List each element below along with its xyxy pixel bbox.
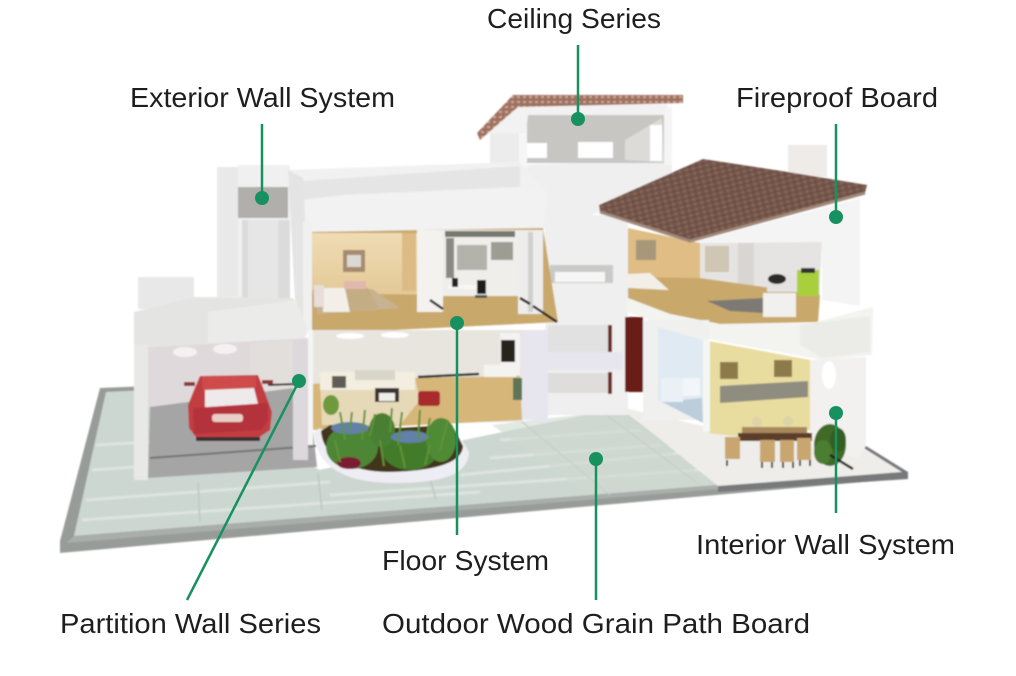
- sofa: [320, 370, 415, 402]
- leader: partition wall series: [187, 374, 306, 600]
- central stack: [522, 215, 628, 420]
- kitchen: [703, 340, 810, 436]
- upper right room: [628, 228, 822, 324]
- pillars: [417, 230, 443, 312]
- red door: [625, 317, 643, 392]
- garage: [134, 277, 317, 480]
- label: floor system: Floor System: [382, 545, 549, 576]
- backsplash: [720, 381, 808, 403]
- bedroom floor: [308, 293, 558, 334]
- garage floor: [148, 386, 317, 478]
- floor slab: [627, 298, 873, 360]
- TV wall unit: [500, 333, 520, 375]
- terrace kerb: [718, 446, 908, 492]
- dining set: [725, 416, 812, 468]
- study room: [443, 230, 519, 296]
- chair figure: [418, 268, 438, 296]
- terracotta roof: [599, 159, 867, 242]
- label: interior wall system: Interior Wall System: [696, 529, 955, 560]
- planter with garden: [314, 395, 469, 483]
- leader: fireproof board: [829, 124, 843, 224]
- leader: exterior wall system: [255, 124, 269, 205]
- label: ceiling series: Ceiling Series: [487, 3, 661, 34]
- potted tree: [814, 424, 846, 466]
- leader: ceiling series: [571, 45, 585, 126]
- bed: [312, 281, 400, 314]
- wall art: [343, 250, 365, 272]
- office chairs: [452, 278, 458, 287]
- right pillar: [810, 357, 866, 458]
- upper roof terrace: [477, 95, 683, 228]
- chimney: [788, 145, 827, 177]
- bathroom: [658, 327, 703, 423]
- bedroom wall: [310, 233, 417, 295]
- green panel: [797, 270, 819, 296]
- lounge sofa: [707, 274, 797, 317]
- leader: floor system: [450, 316, 464, 535]
- garage back wall: [148, 338, 308, 408]
- rear left tower: [217, 165, 290, 300]
- label: partition wall series: Partition Wall Series: [60, 608, 321, 639]
- exterior wall panel: [238, 187, 288, 218]
- house illustration: [60, 95, 908, 553]
- white terrace floor: [620, 407, 904, 486]
- right roof section: [599, 145, 873, 360]
- red ottoman: [418, 391, 440, 406]
- leader: outdoor wood grain path board: [589, 452, 603, 600]
- label: fireproof board: Fireproof Board: [736, 82, 938, 113]
- ground paving: [60, 386, 908, 553]
- garage columns: [134, 345, 148, 480]
- red car: [184, 375, 273, 441]
- desk: [448, 285, 478, 289]
- lower left living room: [308, 330, 522, 445]
- leader: interior wall system: [829, 406, 843, 513]
- main upper volume: [288, 162, 548, 326]
- white bed: [628, 273, 669, 290]
- label: exterior wall system: Exterior Wall System: [130, 82, 395, 113]
- label: outdoor wood grain path board: Outdoor Wood Grain Path Board: [382, 608, 810, 639]
- upper roof tiles: [477, 95, 683, 140]
- right wall: [690, 198, 860, 306]
- ground floor right wing: [643, 320, 866, 469]
- cabinet details: [720, 362, 738, 379]
- upper left rooms: [303, 222, 558, 334]
